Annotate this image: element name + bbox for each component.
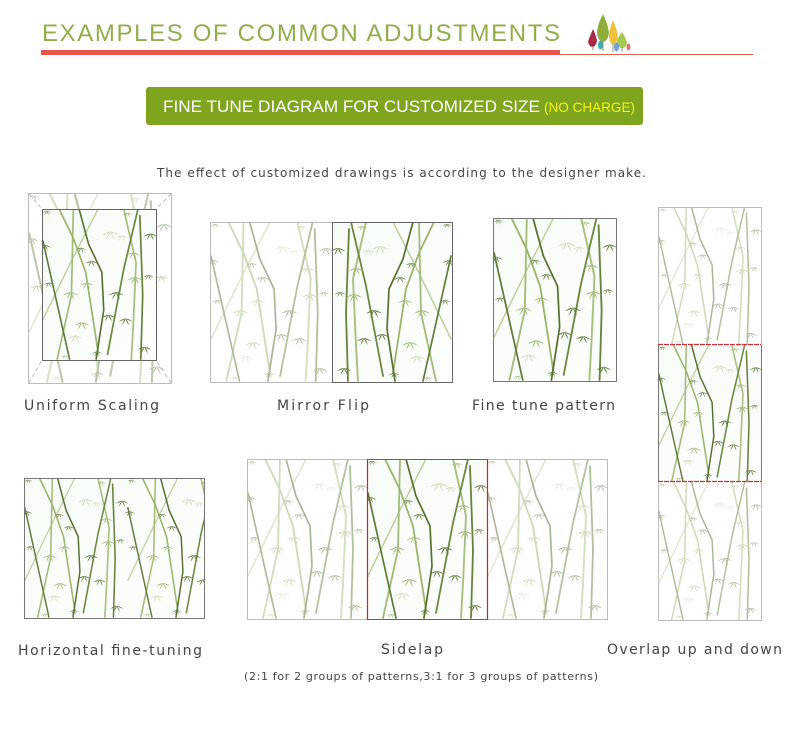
button banner: FINE TUNE DIAGRAM FOR CUSTOMIZED SIZE bbox=[163, 97, 540, 116]
title: EXAMPLES OF COMMON ADJUSTMENTS bbox=[42, 20, 560, 47]
label: uniform scaling: Uniform Scaling bbox=[24, 398, 159, 414]
title underline bbox=[41, 50, 753, 55]
sidelap note: (2:1 for 2 groups of patterns,3:1 for 3 groups of patterns) bbox=[244, 670, 598, 683]
panel: overlap up and down bbox=[655, 207, 762, 620]
panel: horizontal fine-tuning bbox=[21, 478, 232, 618]
panel: fine tune pattern bbox=[489, 218, 618, 382]
panel: uniform scaling bbox=[24, 193, 173, 384]
panel: sidelap bbox=[243, 459, 609, 620]
subtitle note: The effect of customized drawings is according to the designer make. bbox=[156, 166, 646, 180]
icon: watercolor trees bbox=[588, 14, 630, 52]
button banner: (NO CHARGE) bbox=[544, 99, 635, 115]
label: fine tune pattern: Fine tune pattern bbox=[472, 398, 615, 414]
button banner bbox=[146, 87, 643, 125]
panel: mirror flip bbox=[206, 222, 456, 382]
label: overlap up and down: Overlap up and down bbox=[607, 642, 782, 658]
label: sidelap: Sidelap bbox=[381, 642, 443, 658]
label: mirror flip: Mirror Flip bbox=[277, 398, 369, 414]
label: horizontal fine-tuning: Horizontal fine-tuning bbox=[18, 643, 202, 659]
